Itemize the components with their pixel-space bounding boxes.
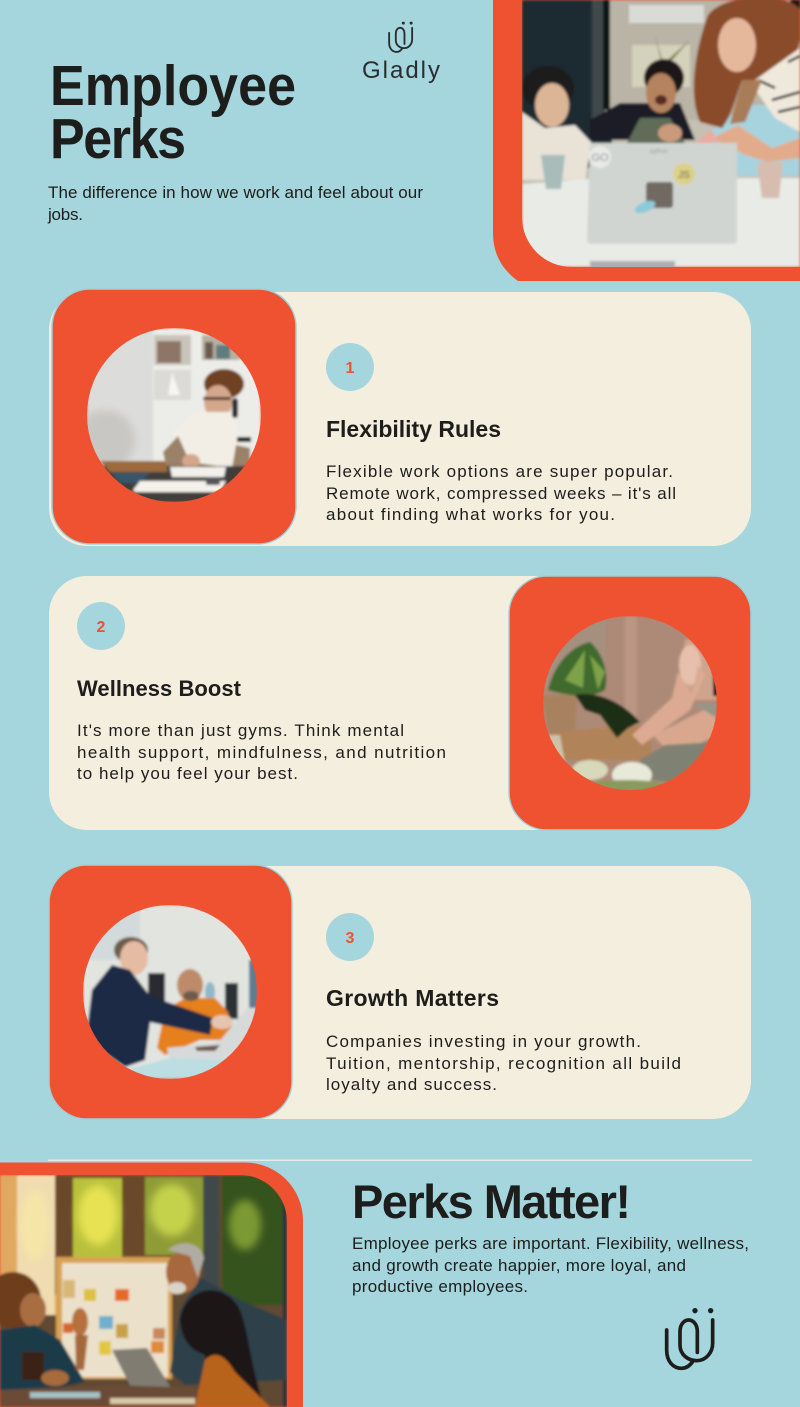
photo: team around a laptop: [522, 0, 800, 269]
title: Employee: [50, 55, 296, 117]
whiteboard with sticky notes: [56, 1257, 172, 1379]
laptop: [111, 1346, 171, 1388]
title: Perks: [50, 108, 186, 170]
photo: woman on phone at desk: [75, 328, 261, 502]
person: woman: [632, 639, 718, 785]
laptop with stickers: [587, 143, 737, 244]
orange image tile: [49, 865, 292, 1119]
person: laughing man in green shirt: [590, 59, 695, 143]
person: man in navy blazer: [87, 937, 233, 1067]
body text: [77, 721, 446, 783]
person: woman seen from behind: [180, 1290, 270, 1407]
panel: 2 Wellness Boost: [49, 576, 751, 830]
table: [0, 1385, 200, 1407]
person: man in blue shirt: [712, 105, 800, 176]
number badge: 3: [346, 930, 355, 947]
closing text: [352, 1234, 749, 1296]
heading: Wellness Boost: [77, 676, 242, 701]
body text: [326, 462, 676, 524]
body text: [326, 1032, 681, 1094]
laptop with stickers: python: [650, 149, 668, 155]
basket: [543, 695, 577, 735]
body text: Companies investing in your growth.: [326, 1032, 641, 1051]
number badge: 1: [346, 360, 355, 377]
closing heading: Perks Matter!: [352, 1175, 631, 1228]
person: woman with curly hair: [0, 1272, 88, 1392]
logo: Gladly: Gladly: [362, 57, 440, 84]
panel: header photo with orange frame: [493, 0, 800, 281]
closing text: and growth create happier, more loyal, and: [352, 1256, 686, 1275]
desk: [128, 1054, 230, 1079]
plant: [548, 642, 640, 738]
person: older man with glasses: [166, 1243, 287, 1385]
number badge: [77, 602, 125, 650]
subtitle: jobs.: [47, 205, 83, 224]
number badge: [326, 913, 374, 961]
body text: to help you feel your best.: [77, 764, 298, 783]
title: [50, 55, 296, 170]
body text: Flexible work options are super popular.: [326, 462, 673, 481]
header block: [47, 22, 440, 224]
icon: paperclip smile: [389, 22, 413, 52]
photo: two colleagues at a laptop: [83, 905, 257, 1079]
closing text: productive employees.: [352, 1277, 528, 1296]
heading: Growth Matters: [326, 985, 499, 1011]
subtitle: The difference in how we work and feel about our: [48, 183, 423, 202]
number badge: 2: [97, 619, 106, 636]
panel: 3 Growth Matters: [49, 865, 751, 1119]
closing text: Employee perks are important. Flexibility, wellness,: [352, 1234, 749, 1253]
logo: Gladly: [362, 22, 440, 84]
body text: Tuition, mentorship, recognition all build: [326, 1054, 681, 1073]
person: man in white sweater: [522, 66, 592, 180]
table: [522, 178, 800, 267]
heading: Flexibility Rules: [326, 416, 501, 442]
icon: Gladly paperclip smile: [667, 1308, 713, 1368]
body text: health support, mindfulness, and nutrition: [77, 743, 446, 762]
panel: footer photo with orange frame: [0, 1162, 303, 1407]
panel: 1 Flexibility Rules: [49, 289, 751, 546]
body text: Remote work, compressed weeks – it's all: [326, 484, 676, 503]
person: woman: [163, 369, 251, 474]
body text: It's more than just gyms. Think mental: [77, 721, 404, 740]
subtitle: [47, 183, 423, 224]
orange image tile: [509, 576, 751, 830]
number badge: [326, 343, 374, 391]
laptop: [167, 1007, 257, 1060]
person: man in orange shirt: [157, 969, 235, 1055]
orange image tile: [52, 289, 296, 544]
body text: loyalty and success.: [326, 1075, 497, 1094]
photo: team meeting at sunny window: [0, 1175, 287, 1407]
body text: about finding what works for you.: [326, 505, 615, 524]
photo: woman relaxing near plants: [543, 616, 718, 796]
foreground flowers: [572, 758, 664, 790]
cups: [541, 155, 783, 198]
person: woman with curly red hair: [694, 0, 800, 162]
laptop with stickers: JS: [678, 170, 690, 181]
laptop with stickers: GO: [591, 152, 609, 164]
